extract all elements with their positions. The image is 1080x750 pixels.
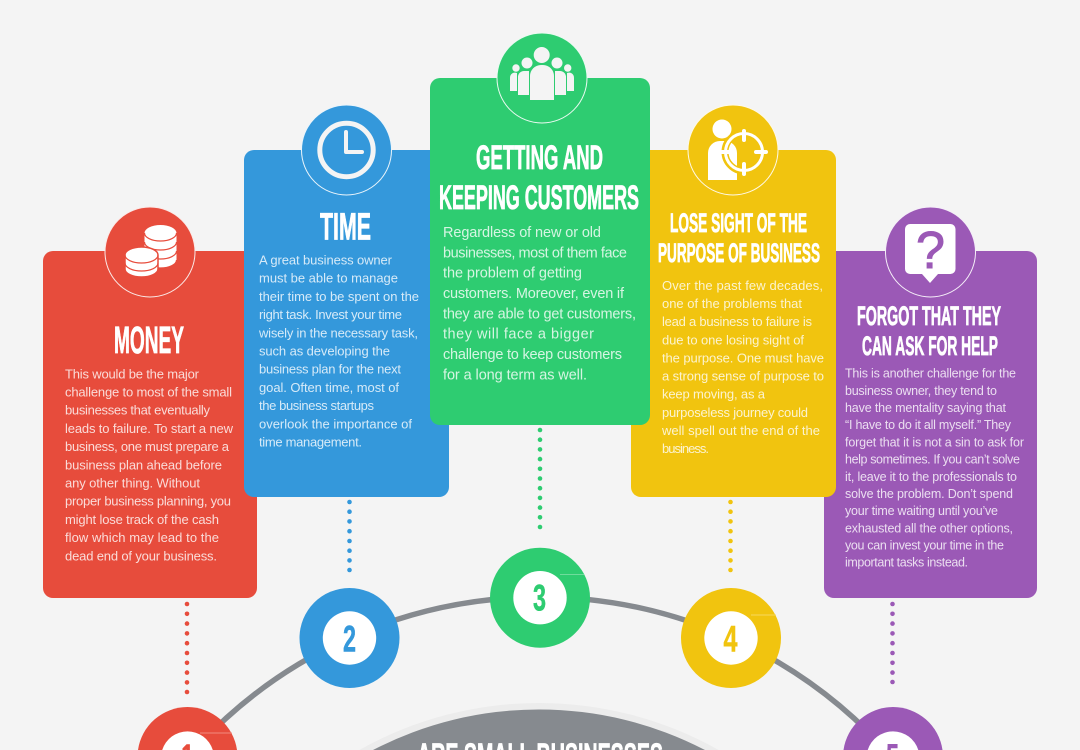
heading: customers: [439, 139, 639, 217]
number badge 4: 4: [724, 618, 738, 660]
text: purpose description: a strong sense of purpose to: [662, 368, 824, 384]
text: help description: solve the problem. Don’t spend: [845, 487, 1013, 501]
text: customers description: they are able to get customers,: [443, 306, 636, 322]
text: customers description: they will face a bigger: [443, 327, 594, 343]
text: purpose description: the purpose. One must have: [662, 350, 824, 365]
heading: help: [857, 301, 1001, 361]
text: help description: business owner, they tend to: [845, 384, 997, 398]
panel: getting and keeping customers: [430, 33, 650, 425]
text: time description: must be able to manage: [259, 270, 398, 286]
dotted connector: purpose: [728, 500, 733, 572]
text: time description: A great business owner: [259, 252, 393, 267]
text: purpose description: lead a business to failure is: [662, 314, 812, 329]
text: help description: exhausted all the other options,: [845, 521, 1013, 535]
connecting arc: [199, 597, 881, 745]
panel: forgot to ask for help: [824, 207, 1037, 598]
text: help description: have the mentality saying that: [845, 401, 1007, 415]
text: time description: goal. Often time, most of: [259, 380, 399, 395]
heading: customers: GETTING AND: [476, 139, 603, 177]
number badge 3: [490, 548, 590, 648]
central title dome: [359, 703, 719, 750]
text: help description: your time waiting until you’ve: [845, 504, 998, 518]
text: time description: time management.: [259, 435, 362, 450]
dotted connector: customers: [538, 428, 542, 529]
icon: question bubble: ?: [916, 222, 945, 280]
text: help description: it, leave it to the professionals to: [845, 470, 1017, 484]
text: time description: right task. Invest your time: [259, 307, 402, 322]
text: customers description: Regardless of new or old: [443, 225, 601, 241]
text: money description: dead end of your business.: [65, 548, 217, 563]
text: purpose description: [661, 278, 824, 456]
panel: money: [43, 207, 257, 598]
icon: person with target: [688, 105, 778, 195]
number badge 5: [844, 707, 942, 750]
text: customers description: challenge to keep customers: [443, 347, 622, 363]
text: money description: business, one must prepare a: [65, 439, 230, 454]
text: customers description: businesses, most of them face: [443, 245, 627, 261]
number badge 1: [138, 707, 237, 750]
text: help description: important tasks instead.: [845, 556, 968, 570]
text: help description: you can invest your time in the: [845, 538, 1004, 552]
text: purpose description: well spell out the end of the: [661, 423, 820, 438]
panel: lose sight of purpose: [631, 105, 836, 497]
heading: purpose: [658, 208, 820, 268]
heading: time: TIME: [320, 206, 371, 248]
number badge 3: 3: [533, 578, 546, 618]
text: money description: proper business planning, you: [65, 494, 231, 509]
text: purpose description: business.: [662, 441, 709, 456]
text: purpose description: purposeless journey could: [662, 405, 808, 420]
panel: time: [244, 105, 449, 497]
text: help description: This is another challenge for the: [845, 367, 1016, 381]
text: time description: such as developing the: [259, 344, 390, 358]
dotted connector: money: [185, 602, 189, 694]
text: customers description: the problem of getting: [443, 266, 582, 282]
text: help description: help sometimes. If you can’t solve: [845, 453, 1020, 467]
text: money description: challenge to most of the small: [65, 384, 232, 400]
text: time description: [258, 252, 419, 450]
heading: money: MONEY: [114, 320, 184, 362]
heading: customers: KEEPING CUSTOMERS: [439, 179, 639, 217]
text: money description: [65, 366, 234, 563]
text: help description: forget that it is not a sin to ask for: [845, 435, 1024, 449]
text: money description: business plan ahead before: [65, 457, 222, 472]
text: money description: might lose track of the cash: [65, 512, 219, 527]
text: money description: leads to failure. To start a new: [65, 421, 234, 436]
text: time description: wisely in the necessary task,: [258, 325, 418, 340]
icon: coins: [105, 207, 195, 297]
icon: question bubble: [886, 207, 976, 297]
text: time description: the business startups: [259, 398, 374, 413]
text: purpose description: due to one losing sight of: [662, 332, 804, 347]
text: customers description: for a long term as well.: [443, 367, 587, 383]
text: time description: business plan for the next: [259, 362, 401, 377]
icon: clock: [302, 105, 392, 195]
text: purpose description: one of the problems that: [662, 296, 802, 311]
heading: purpose: LOSE SIGHT OF THE: [670, 208, 807, 238]
text: purpose description: keep moving, as a: [662, 387, 766, 402]
number badge 4: [681, 588, 781, 688]
icon: group of people: [497, 33, 587, 123]
text: help description: [845, 367, 1024, 570]
text: help description: “I have to do it all myself.” They: [845, 418, 1012, 432]
text: money description: businesses that eventually: [65, 403, 210, 418]
number badge 2: [300, 588, 400, 688]
dotted connector: time: [347, 500, 352, 572]
text: time description: their time to be spent on the: [259, 289, 419, 304]
text: customers description: [443, 225, 636, 383]
text: money description: any other thing. Without: [65, 476, 200, 490]
number badge 2: 2: [343, 618, 356, 660]
text: time description: overlook the importance of: [259, 416, 412, 432]
dotted connector: help: [890, 602, 895, 684]
text: money description: flow which may lead to the: [65, 530, 219, 545]
text: customers description: customers. Moreover, even if: [443, 286, 625, 302]
text: money description: This would be the major: [65, 366, 200, 381]
text: purpose description: Over the past few decades,: [662, 278, 823, 293]
heading: purpose: PURPOSE OF BUSINESS: [658, 238, 820, 268]
